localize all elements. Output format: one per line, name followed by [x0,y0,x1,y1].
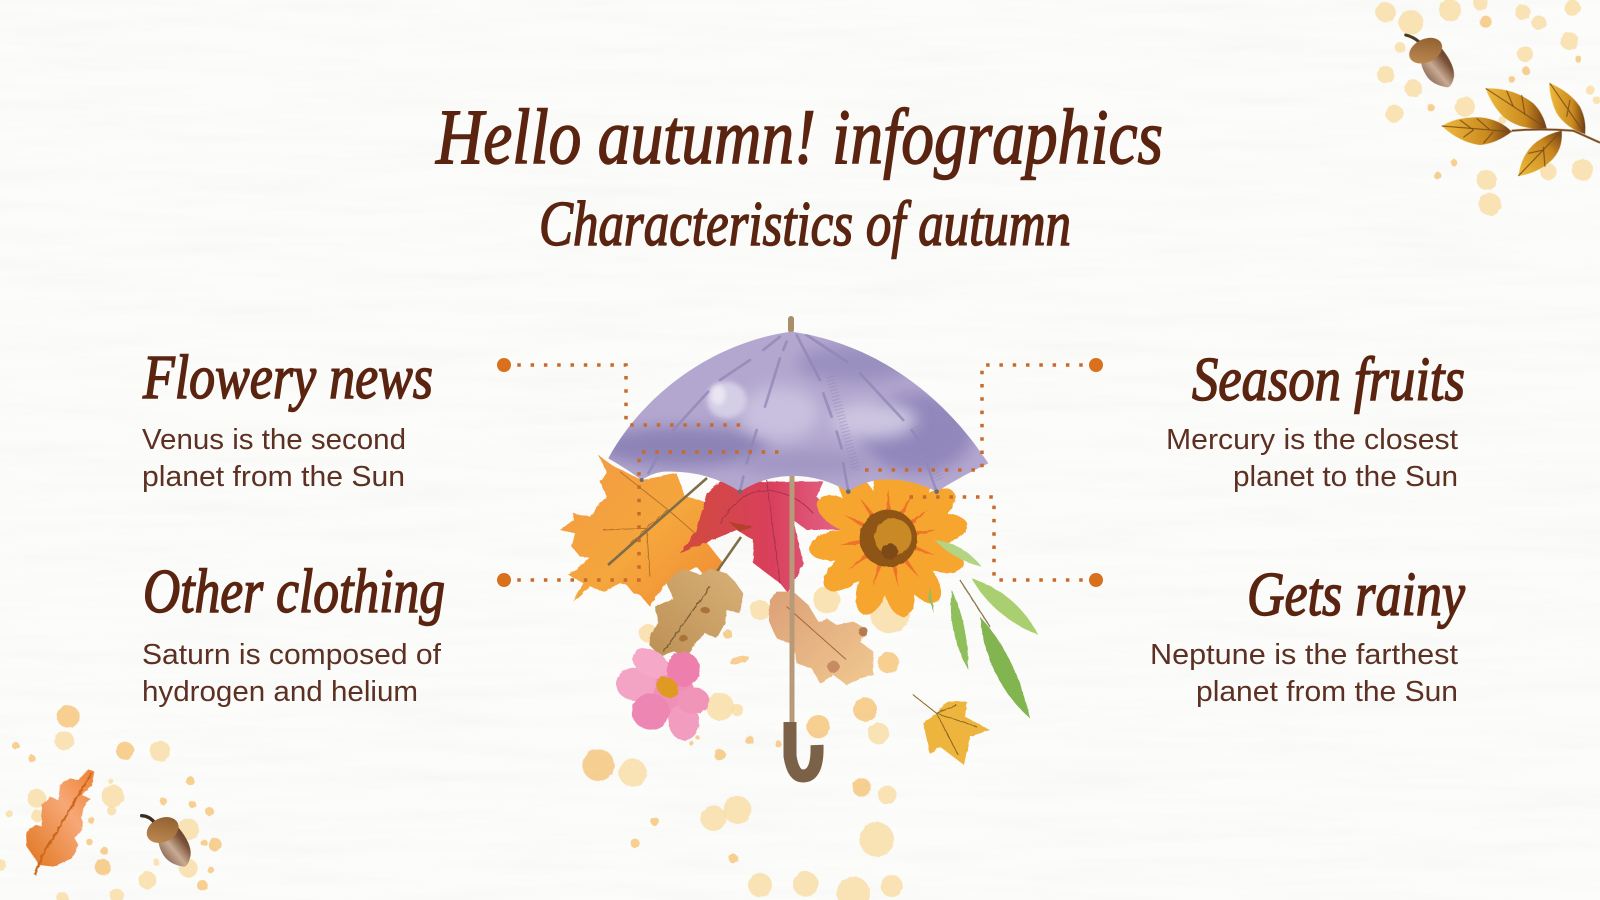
icon: umbrella tip [788,316,794,333]
illustration: lower splashes [582,587,910,900]
panel: season fruits: Season fruits [1192,346,1465,414]
connector: flowery news [497,358,745,425]
connector: gets rainy [905,497,1103,587]
panel: flowery news [142,344,433,493]
icon: acorn [1405,33,1454,87]
panel: season fruits: planet to the Sun [1233,461,1458,493]
icon: tan oak leaf [649,568,743,656]
icon: peach oak leaf [768,592,873,685]
title: Hello autumn! infographics [435,93,1163,180]
splashes [1376,0,1600,216]
icon: yellow maple leaf [913,695,990,765]
panel: other clothing: Saturn is composed of [142,639,442,671]
icon: umbrella canopy [597,332,988,494]
panel: other clothing [142,558,445,708]
panel: gets rainy: Neptune is the farthest [1150,639,1458,671]
decoration: top right corner [1376,0,1600,216]
icon: acorn [142,812,191,867]
connector: other clothing [497,452,782,587]
icon: umbrella handle [790,722,817,776]
icon: sunflower [807,458,970,620]
splashes [0,705,222,900]
icon: umbrella shaft [790,472,794,722]
icon: pink flower [616,642,709,740]
subtitle: Characteristics of autumn [539,188,1071,259]
panel: flowery news: planet from the Sun [142,461,405,493]
icon: green leaves [928,540,1038,718]
icon: branch with leaves [1442,83,1600,176]
icon: red leaf [680,480,847,593]
panel: flowery news: Flowery news [142,344,433,412]
icon: orange maple leaf [560,455,723,607]
connector: season fruits [860,358,1103,470]
panel: flowery news: Venus is the second [142,424,406,456]
panel: other clothing: Other clothing [143,558,445,626]
panel: other clothing: hydrogen and helium [142,676,418,708]
decoration: bottom left corner [0,705,222,900]
panel: gets rainy: Gets rainy [1247,561,1465,629]
icon: orange oak leaf [26,769,94,875]
panel: gets rainy: planet from the Sun [1196,676,1458,708]
icon: stem [608,478,741,610]
panel: season fruits: Mercury is the closest [1166,424,1458,456]
panel: season fruits [1166,346,1465,493]
illustration: umbrella bouquet [560,316,1038,776]
panel: gets rainy [1150,561,1465,708]
